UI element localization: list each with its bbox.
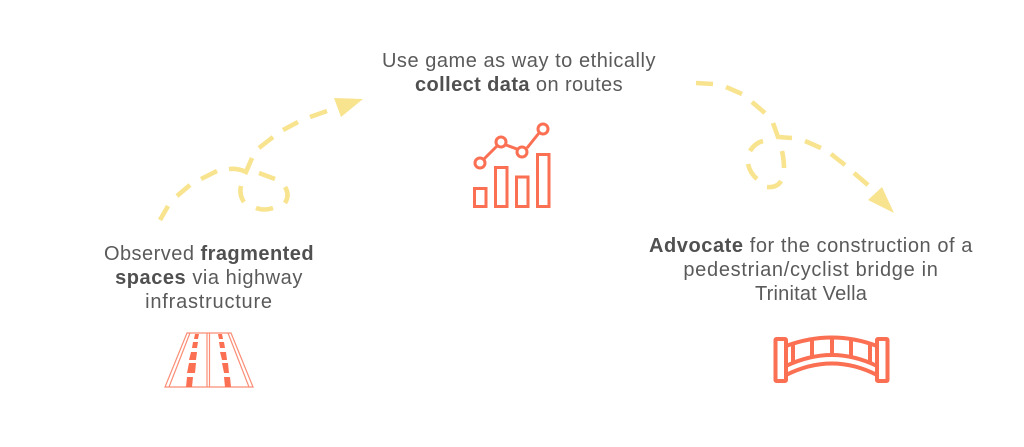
text: highway step: Observed fragmented bbox=[104, 243, 314, 265]
text: highway step: spaces via highway bbox=[115, 267, 303, 289]
arrow: dashed loop from highway step to game step bbox=[160, 98, 363, 220]
text: game step: collect data on routes bbox=[415, 74, 623, 96]
text: game step: Use game as way to ethically bbox=[382, 50, 656, 72]
icon: arched bridge bbox=[776, 337, 888, 381]
arrow: dashed loop from game step to bridge step bbox=[696, 83, 894, 213]
icon: line and bar chart bbox=[474, 124, 549, 206]
text: bridge step: pedestrian/cyclist bridge in bbox=[683, 259, 939, 281]
text: highway step: infrastructure bbox=[145, 291, 273, 313]
text: bridge step: Trinitat Vella bbox=[755, 283, 868, 305]
text: bridge step: Advocate for the construction of a bbox=[649, 235, 973, 257]
icon: highway road bbox=[165, 333, 253, 387]
